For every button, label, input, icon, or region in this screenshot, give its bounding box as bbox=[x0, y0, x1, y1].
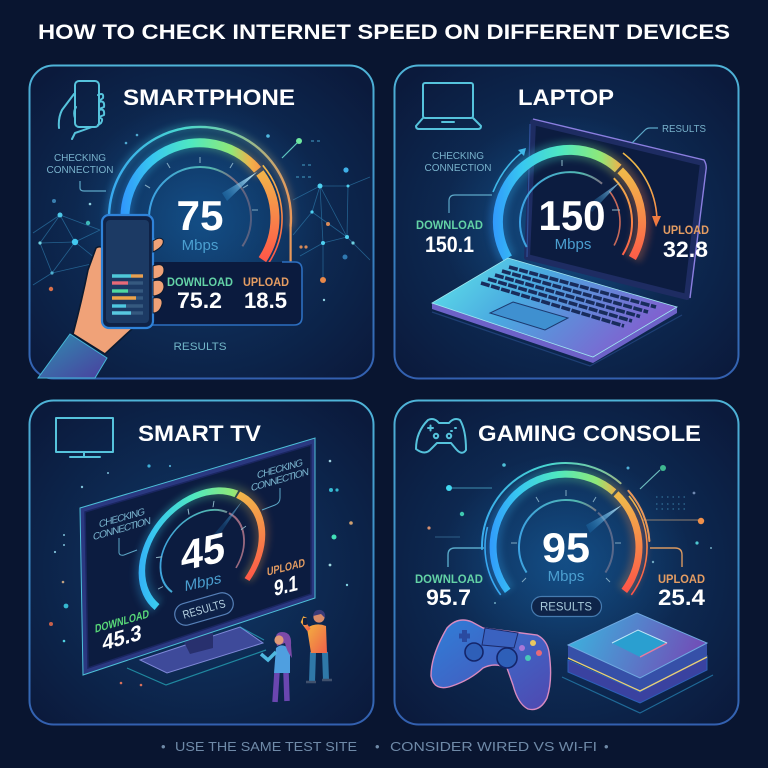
speed readout: Mbps bbox=[548, 568, 584, 585]
connection label left: CHECKING bbox=[99, 507, 145, 531]
results pill: RESULTS bbox=[181, 598, 227, 622]
panel: gaming console bbox=[394, 400, 738, 724]
connection label left bbox=[93, 505, 151, 555]
connection label bbox=[46, 153, 114, 191]
connection label bbox=[424, 148, 526, 213]
heading: GAMING CONSOLE bbox=[478, 421, 701, 446]
people bbox=[261, 610, 332, 702]
download readout: DOWNLOAD bbox=[95, 607, 149, 636]
speed readout: 95 bbox=[542, 524, 590, 571]
upload readout bbox=[267, 556, 305, 603]
connection label: CONNECTION bbox=[46, 165, 114, 176]
icon: television bbox=[56, 418, 113, 457]
gauge bbox=[482, 463, 649, 595]
results pill bbox=[172, 590, 236, 628]
download connector bbox=[448, 548, 484, 567]
download readout bbox=[415, 574, 483, 610]
title: HOW TO CHECK INTERNET SPEED ON DIFFERENT DEVICES bbox=[38, 21, 730, 44]
icon: game controller bbox=[416, 419, 466, 453]
upload connector bbox=[650, 548, 682, 567]
panel: smartphone bbox=[30, 66, 374, 378]
gauge bbox=[142, 475, 262, 612]
game controller bbox=[431, 620, 551, 710]
download and upload box: UPLOAD bbox=[243, 277, 289, 289]
speed readout: Mbps bbox=[182, 237, 218, 254]
connection label right bbox=[251, 456, 309, 510]
tv stand bbox=[127, 627, 266, 685]
woman bbox=[261, 632, 292, 702]
panel: laptop bbox=[394, 66, 738, 378]
footer tips: • bbox=[604, 739, 609, 754]
footer tips: • bbox=[161, 739, 166, 754]
footer tips: USE THE SAME TEST SITE bbox=[175, 739, 357, 754]
gauge bbox=[109, 127, 291, 264]
footer tips: CONSIDER WIRED VS WI-FI bbox=[390, 739, 597, 754]
upload readout: UPLOAD bbox=[663, 225, 709, 237]
upload readout bbox=[663, 225, 709, 262]
connection label: CHECKING bbox=[54, 153, 106, 164]
fingers bbox=[153, 238, 164, 313]
results label: RESULTS bbox=[662, 123, 706, 135]
connection label right: CHECKING bbox=[257, 458, 303, 482]
download and upload box: 75.2 bbox=[177, 288, 222, 313]
icon: laptop bbox=[416, 83, 481, 129]
heading: LAPTOP bbox=[518, 85, 614, 110]
upload readout: 32.8 bbox=[663, 237, 708, 262]
background dots bbox=[427, 463, 712, 604]
panel: smart tv bbox=[30, 400, 374, 724]
heading: SMART TV bbox=[138, 421, 261, 446]
upload readout: 25.4 bbox=[658, 585, 706, 610]
download readout: 95.7 bbox=[426, 585, 471, 610]
footer tips bbox=[161, 739, 609, 754]
connection label left: CONNECTION bbox=[93, 516, 151, 543]
download and upload box: 18.5 bbox=[244, 288, 287, 313]
phone body bbox=[102, 215, 153, 328]
icon: hand holding phone bbox=[59, 81, 104, 139]
speed readout: 45 bbox=[181, 523, 225, 581]
connection label right: CONNECTION bbox=[251, 467, 309, 494]
results label bbox=[632, 123, 706, 143]
heading: SMARTPHONE bbox=[123, 85, 295, 110]
speed readout: Mbps bbox=[555, 236, 591, 253]
download readout bbox=[416, 220, 483, 257]
speed readout: 150 bbox=[538, 192, 606, 239]
trackpad bbox=[490, 302, 568, 330]
download readout: DOWNLOAD bbox=[415, 574, 483, 586]
results label: RESULTS bbox=[174, 341, 226, 353]
laptop base bbox=[432, 258, 682, 366]
download readout: DOWNLOAD bbox=[416, 220, 483, 232]
speed readout: 75 bbox=[176, 192, 224, 239]
game console bbox=[562, 613, 713, 713]
download and upload box bbox=[150, 262, 302, 325]
upload readout: UPLOAD bbox=[658, 574, 705, 586]
background dots bbox=[49, 460, 353, 686]
hand and phone bbox=[38, 215, 164, 378]
keyboard bbox=[481, 267, 656, 326]
sleeve bbox=[38, 334, 107, 378]
network decoration bbox=[33, 134, 370, 301]
palm bbox=[73, 247, 133, 354]
upload readout bbox=[658, 574, 706, 610]
tv screen bbox=[80, 438, 315, 675]
laptop screen bbox=[527, 119, 706, 298]
footer tips: • bbox=[375, 739, 380, 754]
download readout: 150.1 bbox=[425, 232, 474, 257]
download and upload box: DOWNLOAD bbox=[167, 277, 233, 289]
speed readout: Mbps bbox=[185, 570, 222, 595]
connection label: CHECKING bbox=[432, 151, 484, 162]
results pill: RESULTS bbox=[540, 602, 592, 614]
connection label: CONNECTION bbox=[424, 163, 492, 174]
gauge bbox=[498, 150, 661, 258]
man bbox=[303, 610, 332, 682]
results pill bbox=[532, 596, 602, 616]
upload readout: UPLOAD bbox=[267, 556, 305, 579]
upload readout: 9.1 bbox=[274, 570, 298, 601]
download readout: 45.3 bbox=[102, 620, 142, 655]
screen bars bbox=[112, 276, 143, 313]
download readout bbox=[95, 607, 149, 658]
